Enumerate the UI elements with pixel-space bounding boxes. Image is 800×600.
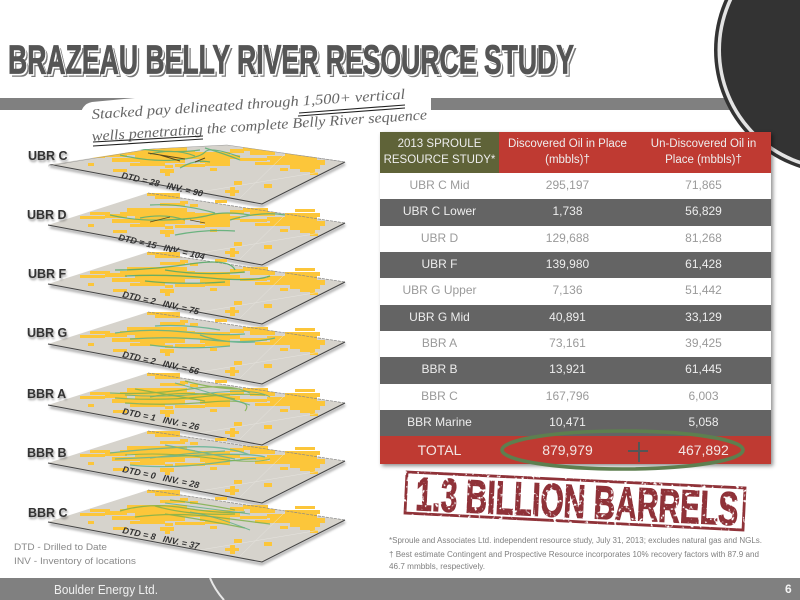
row: UBR F xyxy=(380,252,771,278)
footer bar: 6 xyxy=(785,582,792,596)
title xyxy=(8,36,576,86)
row: UBR C Mid xyxy=(409,178,722,192)
stacked map layer: BBR A: DTD = 1 INV. = 26 xyxy=(122,406,201,432)
row: UBR D: UBR D xyxy=(421,231,458,245)
footnotes: † Best estimate Contingent and Prospective Resource incorporates 10% recovery factors with 87.9 and xyxy=(389,550,759,559)
stacked map layer: UBR D xyxy=(48,193,345,267)
row: BBR Marine: BBR Marine xyxy=(407,415,472,429)
footer bar: Boulder Energy Ltd. xyxy=(54,583,158,597)
row: BBR A: 39,425 xyxy=(685,336,722,350)
stacked map layer: UBR G xyxy=(48,312,345,386)
table header xyxy=(380,132,771,173)
callout: stacked pay note: Stacked pay delineated through 1,500+ vertical xyxy=(91,87,406,123)
stacked map layer: UBR G: DTD = 2 INV. = 56 xyxy=(122,349,201,377)
label: UBR D: UBR D xyxy=(27,208,67,222)
row: BBR C xyxy=(421,388,719,402)
row: UBR C Lower xyxy=(380,199,771,226)
footer bar xyxy=(0,578,800,600)
total highlight oval and plus sign xyxy=(500,429,745,471)
label: UBR F: UBR F xyxy=(28,267,67,281)
row: total: 467,892 xyxy=(678,442,729,458)
row: UBR C Lower: UBR C Lower xyxy=(403,204,476,218)
row: BBR B xyxy=(380,357,771,384)
row: UBR C Mid: 295,197 xyxy=(546,178,589,192)
row: total xyxy=(380,436,771,464)
stacked map layer: BBR B xyxy=(48,431,345,505)
stacked map layer: UBR D: DTD = 15 INV. = 104 xyxy=(118,232,206,262)
label: UBR C: UBR C xyxy=(28,149,68,163)
row: BBR C: 6,003 xyxy=(688,388,719,402)
resource table xyxy=(380,132,771,464)
callout: stacked pay note xyxy=(80,87,431,150)
row: UBR G Upper: UBR G Upper xyxy=(402,283,477,297)
row: UBR F: UBR F xyxy=(422,257,458,271)
table header: Un-Discovered Oil in Place (mbbls)† xyxy=(651,138,756,166)
legend: abbreviations xyxy=(14,542,136,567)
row: UBR D: 129,688 xyxy=(546,231,589,245)
row: UBR D: 81,268 xyxy=(685,231,722,245)
row: BBR B: 13,921 xyxy=(549,362,586,376)
background dark circle xyxy=(0,0,800,174)
row: BBR A: 73,161 xyxy=(549,336,586,350)
row: UBR G Mid xyxy=(380,305,771,331)
stacked map layer: UBR C: DTD = 28 INV. = 90 xyxy=(121,170,204,199)
row: BBR Marine: 10,471 xyxy=(549,415,586,429)
row: UBR G Mid: 33,129 xyxy=(685,310,722,324)
footnotes xyxy=(389,536,762,571)
stacked map layer: UBR F: DTD = 2 INV. = 75 xyxy=(122,289,201,317)
footnotes: *Sproule and Associates Ltd. independent resource study, July 31, 2013; excludes natural gas and NGLs. xyxy=(389,536,762,545)
row: total: 879,979 xyxy=(542,442,593,458)
legend: abbreviations: INV - Inventory of locations xyxy=(14,556,136,567)
row: UBR F: 139,980 xyxy=(546,257,589,271)
stacked map layer: BBR B: DTD = 0 INV. = 28 xyxy=(122,464,200,490)
row: BBR Marine: 5,058 xyxy=(688,415,719,429)
row: UBR C Mid: 71,865 xyxy=(685,178,722,192)
row: UBR G Upper: 51,442 xyxy=(685,283,722,297)
row: BBR A: BBR A xyxy=(422,336,457,350)
stacked map layer: BBR A xyxy=(48,373,345,447)
stacked map layer: UBR F xyxy=(48,252,345,326)
row: UBR C Lower: 56,829 xyxy=(685,204,722,218)
row: UBR C Lower: 1,738 xyxy=(552,204,583,218)
label: UBR G: UBR G xyxy=(27,326,67,340)
callout: stacked pay note: wells penetrating the complete Belly River sequence xyxy=(91,107,428,145)
legend: abbreviations: DTD - Drilled to Date xyxy=(14,542,107,553)
row: UBR G Upper xyxy=(402,283,722,297)
row: total: TOTAL xyxy=(418,442,461,458)
row: UBR G Upper: 7,136 xyxy=(552,283,583,297)
label: BBR B: BBR B xyxy=(27,446,67,460)
row: BBR C: 167,796 xyxy=(546,388,589,402)
stacked map layer: BBR C: DTD = 8 INV. = 37 xyxy=(122,525,201,551)
row: BBR A xyxy=(422,336,722,350)
row: BBR B: 61,445 xyxy=(685,362,722,376)
footnotes: 46.7 mmbbls, respectively. xyxy=(389,562,485,571)
row: UBR D xyxy=(421,231,722,245)
table header: Discovered Oil in Place (mbbls)† xyxy=(508,138,627,166)
label: BBR A: BBR A xyxy=(27,387,66,401)
row: UBR F: 61,428 xyxy=(685,257,722,271)
row: BBR C: BBR C xyxy=(421,388,458,402)
stacked map layer: BBR C xyxy=(48,490,345,564)
row: UBR C Mid: UBR C Mid xyxy=(409,178,470,192)
label: BBR C: BBR C xyxy=(28,506,68,520)
row: BBR B: BBR B xyxy=(421,362,458,376)
row: UBR G Mid: UBR G Mid xyxy=(409,310,470,324)
row: BBR Marine xyxy=(380,410,771,436)
stacked map layer: UBR C xyxy=(40,122,350,206)
row: UBR G Mid: 40,891 xyxy=(549,310,586,324)
table header: 2013 SPROULE RESOURCE STUDY* xyxy=(384,138,495,166)
